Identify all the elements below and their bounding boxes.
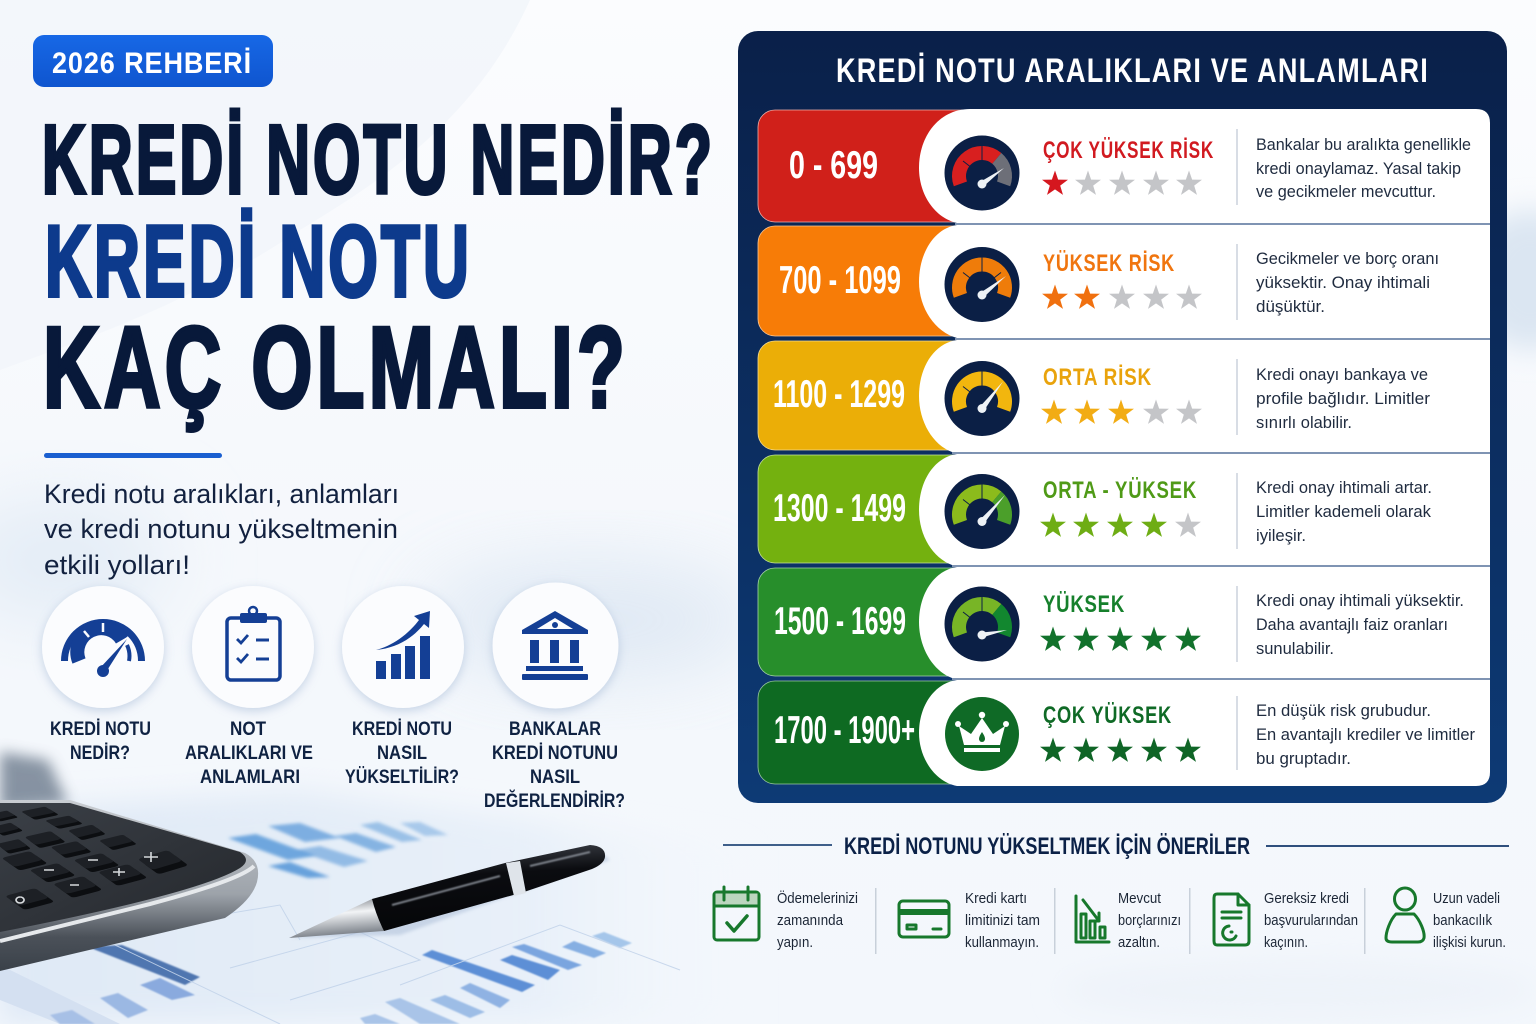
tip: odemeler: yapın. [777, 934, 813, 951]
row: 1100-1299: Kredi onayı bankaya ve [1256, 365, 1428, 384]
tip: kredi karti [899, 890, 1040, 951]
pen tip cone [289, 899, 384, 938]
row: 0-699: kredi onaylamaz. Yasal takip [1256, 159, 1461, 178]
row: 0-699: ve gecikmeler mevcuttur. [1256, 182, 1436, 201]
tip: basvurular [1214, 890, 1358, 951]
icon: falling chart [1076, 896, 1109, 942]
stars [1040, 738, 1201, 762]
icon: crown [945, 697, 1019, 771]
photo: calculator, pen and financial charts [0, 752, 760, 1024]
title [42, 105, 715, 432]
subtitle: Kredi notu aralıkları, anlamları [44, 479, 399, 509]
tip: odemeler: zamanında [777, 912, 844, 929]
tip: kredi karti: limitinizi tam [965, 912, 1040, 929]
blurred chart bars top [228, 822, 448, 878]
icon: gauge [944, 361, 1020, 436]
tip: odemeler: Ödemelerinizi [777, 889, 858, 907]
calculator top [0, 803, 246, 932]
icon: gauge [944, 247, 1020, 322]
row: 700-1099: Gecikmeler ve borç oranı [1256, 249, 1439, 268]
topic: not araliklari: NOT [230, 719, 266, 740]
row: 0-699: 0 - 699 [789, 144, 878, 187]
row: 700-1099 [758, 225, 1490, 338]
row: 1100-1299 [758, 340, 1490, 452]
topic: not araliklari: ARALIKLARI VE [185, 743, 313, 764]
row: 1100-1299: 1100 - 1299 [773, 373, 905, 416]
topic: not araliklari: ANLAMLARI [200, 767, 300, 788]
paper sheet [0, 790, 760, 1024]
title: KAÇ OLMALI? [43, 304, 629, 432]
pen barrel [372, 845, 605, 931]
topic: kredi notu nedir: NEDİR? [70, 743, 130, 764]
row: 700-1099: 700 - 1099 [779, 259, 901, 302]
pen highlight [392, 852, 590, 905]
icon: document [1214, 894, 1249, 945]
calculator body rim [0, 800, 258, 971]
topic: bankalar: KREDİ NOTUNU [492, 743, 618, 764]
row: 1500-1699: YÜKSEK [1043, 591, 1125, 618]
icon: clipboard [192, 586, 314, 708]
topic: bankalar: NASIL [530, 767, 580, 788]
icon: credit card [899, 901, 949, 937]
subtitle [44, 479, 399, 580]
subtitle: etkili yolları! [44, 550, 190, 580]
paper lower shadow tint [0, 965, 120, 1024]
tip: banka iliskisi: bankacılık [1433, 912, 1492, 929]
icon: person [1386, 888, 1424, 942]
row: 1700-1900+: ÇOK YÜKSEK [1043, 702, 1172, 729]
row: 700-1099: yüksektir. Onay ihtimali [1256, 273, 1430, 292]
icon: calendar [714, 887, 759, 940]
topic: nasil yukseltilir [342, 586, 464, 788]
tip: banka iliskisi [1386, 888, 1506, 951]
tip: borclar: borçlarınızı [1118, 912, 1181, 929]
topic: bankalar: BANKALAR [509, 719, 601, 740]
calculator keys [0, 806, 188, 910]
row: 700-1099: YÜKSEK RİSK [1043, 250, 1175, 277]
icon: gauge [944, 586, 1020, 662]
title: KREDİ NOTU [45, 206, 472, 318]
lower blue bars [50, 932, 632, 1024]
row: 1700-1900+: En avantajlı krediler ve limitler [1256, 725, 1475, 744]
row: 1500-1699: Kredi onay ihtimali yüksektir. [1256, 591, 1464, 610]
icon: bank [492, 582, 618, 708]
tip: basvurular: kaçının. [1264, 934, 1308, 951]
stars [1042, 284, 1202, 309]
tip: banka iliskisi: ilişkisi kurun. [1433, 934, 1506, 951]
calculator back blur [0, 752, 68, 810]
badge: 2026 rehberi: 2026 REHBERİ [52, 47, 252, 80]
row: 1500-1699: 1500 - 1699 [774, 600, 906, 643]
topic: bankalar: DEĞERLENDİRİR? [484, 790, 625, 812]
tip: borclar: Mevcut [1118, 890, 1162, 907]
calculator rim bright edge [0, 866, 254, 941]
topic: nasil yukseltilir: KREDİ NOTU [352, 719, 452, 740]
row: 1700-1900+: En düşük risk grubudur. [1256, 701, 1431, 720]
row: 1300-1499: 1300 - 1499 [773, 487, 906, 530]
row: 700-1099: düşüktür. [1256, 297, 1325, 316]
subtitle: ve kredi notunu yükseltmenin [44, 514, 398, 544]
stars [1041, 400, 1202, 424]
row: 1300-1499 [758, 454, 1490, 565]
topic: kredi notu nedir [42, 586, 164, 764]
topic: bankalar [484, 582, 625, 812]
tip: kredi karti: kullanmayın. [965, 934, 1039, 951]
row: 1700-1900+ [758, 680, 1490, 786]
row: 1500-1699 [758, 567, 1490, 678]
row: 0-699: Bankalar bu aralıkta genellikle [1256, 135, 1471, 154]
panel: kredi notu araliklari [738, 31, 1507, 803]
topic: nasil yukseltilir: NASIL [377, 743, 427, 764]
row: 1300-1499: iyileşir. [1256, 526, 1306, 545]
tip: basvurular: Gereksiz kredi [1264, 890, 1349, 907]
title: KREDİ NOTU NEDİR? [42, 105, 715, 214]
row: 1700-1900+: 1700 - 1900+ [774, 709, 915, 752]
row: 1300-1499: Limitler kademeli olarak [1256, 502, 1431, 521]
topic: kredi notu nedir: KREDİ NOTU [50, 719, 151, 740]
pen band [506, 861, 526, 896]
icon: gauge [944, 136, 1020, 210]
title underline [44, 453, 222, 458]
pen shadow [292, 852, 610, 938]
tip: odemeler [714, 887, 858, 951]
topic: not araliklari [185, 586, 314, 788]
tips heading: KREDİ NOTUNU YÜKSELTMEK İÇİN ÖNERİLER [844, 833, 1250, 860]
row: 1300-1499: ORTA - YÜKSEK [1043, 477, 1197, 504]
stars [1040, 626, 1201, 651]
icon: gauge [42, 586, 164, 708]
faint table lines [115, 905, 680, 1024]
topic: nasil yukseltilir: YÜKSELTİLİR? [345, 767, 459, 788]
tip: banka iliskisi: Uzun vadeli [1433, 890, 1500, 907]
row: 1100-1299: ORTA RİSK [1043, 364, 1152, 391]
tip: borclar: azaltın. [1118, 934, 1160, 951]
stars [1040, 512, 1201, 537]
stars [1042, 170, 1202, 195]
key symbols [16, 852, 158, 903]
row: 1700-1900+: bu gruptadır. [1256, 749, 1351, 768]
tip: kredi karti: Kredi kartı [965, 890, 1027, 907]
tip: basvurular: başvurularından [1264, 912, 1358, 929]
row: 1500-1699: sunulabilir. [1256, 639, 1334, 658]
icon: rising bar chart [342, 586, 464, 708]
row: 1500-1699: Daha avantajlı faiz oranları [1256, 615, 1448, 634]
row: 1100-1299: sınırlı olabilir. [1256, 413, 1352, 432]
row: 0-699: ÇOK YÜKSEK RİSK [1043, 137, 1214, 164]
icon: gauge [944, 474, 1020, 549]
row: 0-699 [758, 109, 1490, 223]
row: 1300-1499: Kredi onay ihtimali artar. [1256, 478, 1432, 497]
row: 1100-1299: profile bağlıdır. Limitler [1256, 389, 1430, 408]
tip: borclar [1076, 890, 1181, 951]
badge: 2026 rehberi [33, 35, 273, 87]
